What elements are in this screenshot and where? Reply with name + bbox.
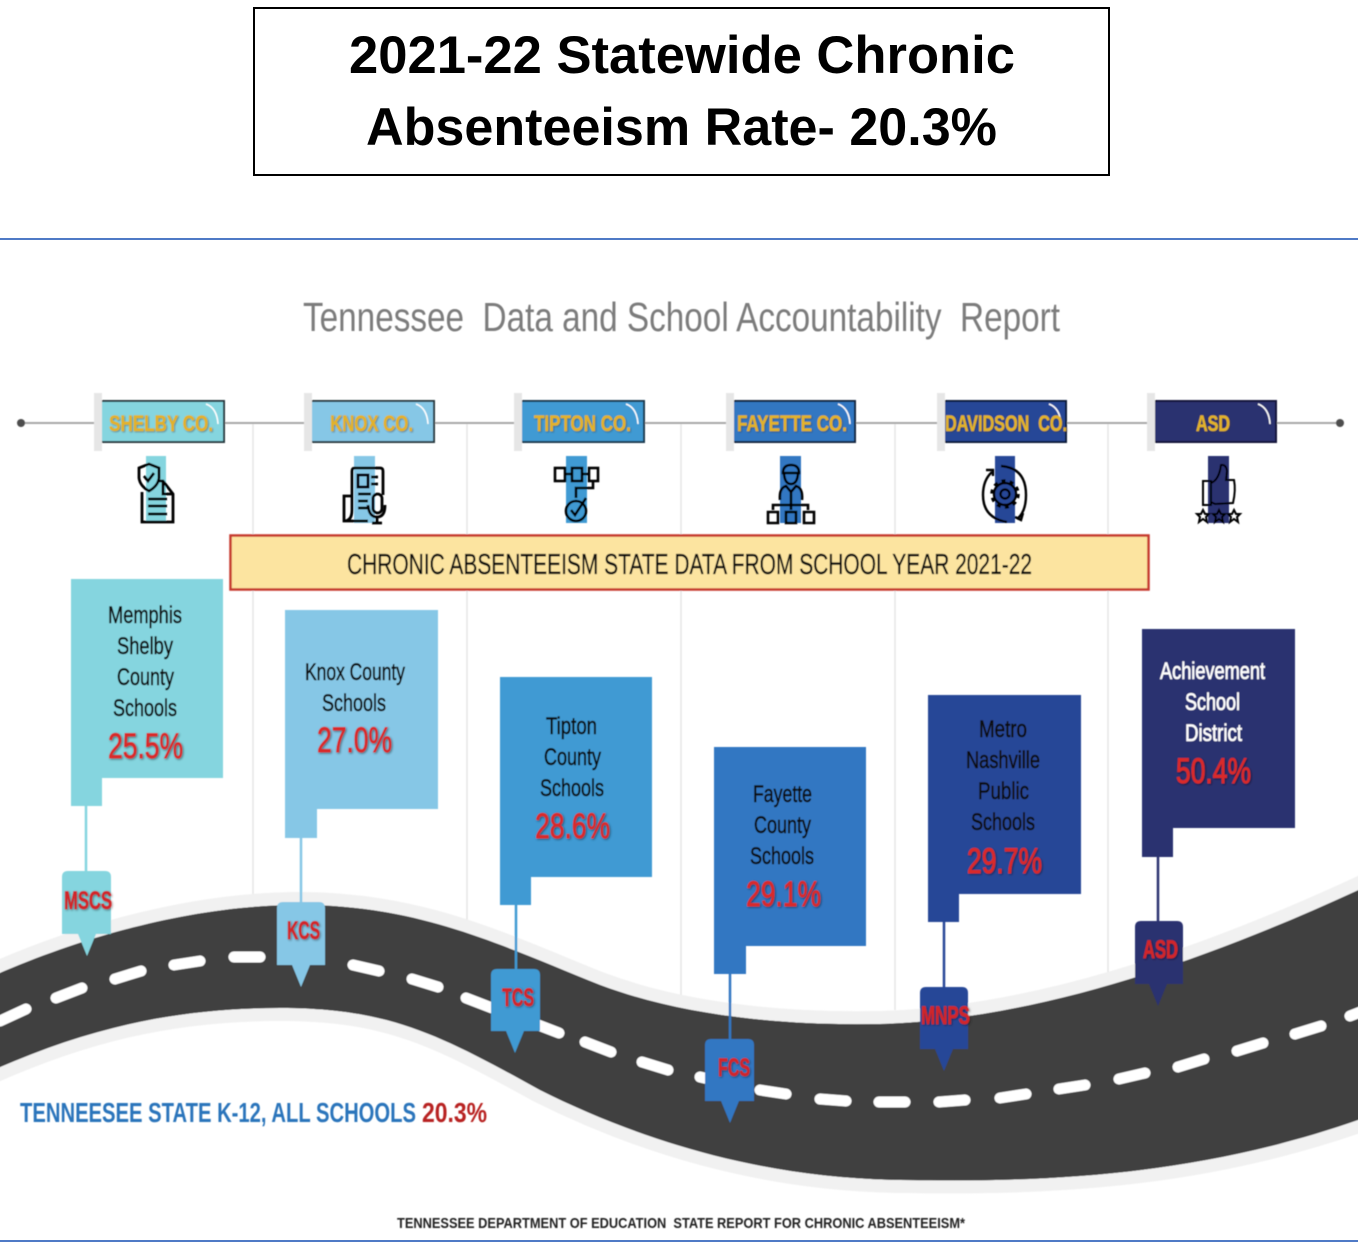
callout: Memphis Shelby County Schools: 25.5% xyxy=(108,727,183,766)
pin: MNPS: MNPS xyxy=(921,1002,970,1030)
timeline line xyxy=(17,419,1344,427)
pin: ASD: ASD xyxy=(1143,936,1178,964)
callout: Fayette County Schools: Schools xyxy=(750,843,814,870)
callout: Memphis Shelby County Schools: Schools xyxy=(113,695,177,722)
tag: Shelby Co. xyxy=(94,393,224,451)
pin: MSCS: MSCS xyxy=(64,887,112,915)
road xyxy=(0,880,1358,1180)
statewide rate label: 20.3% xyxy=(422,1097,487,1128)
pin: TCS xyxy=(491,969,540,1053)
pin: MSCS xyxy=(62,871,112,956)
tag: Tipton Co.: TIPTON CO. xyxy=(534,411,631,436)
callout: Knox County Schools: 27.0% xyxy=(317,721,392,760)
callout: Achievement School District: 50.4% xyxy=(1176,752,1251,791)
pin: TCS: TCS xyxy=(502,984,534,1012)
pin: FCS xyxy=(705,1039,754,1123)
callout: Tipton County Schools: 28.6% xyxy=(535,807,610,846)
callout: Metro Nashville Public Schools: Nashville xyxy=(966,747,1040,774)
callout: Fayette County Schools: 29.1% xyxy=(746,875,821,914)
callout: Memphis Shelby County Schools: County xyxy=(117,664,174,691)
tag: Fayette Co. xyxy=(726,393,855,451)
statewide rate label: TENNEESEE STATE K-12, ALL SCHOOLS xyxy=(20,1097,416,1128)
callout: Tipton County Schools: Tipton xyxy=(546,713,597,740)
callout: Memphis Shelby County Schools: Memphis xyxy=(108,602,182,629)
tag: Davidson Co.: DAVIDSON CO. xyxy=(945,411,1067,436)
callout: Metro Nashville Public Schools: Schools xyxy=(971,809,1035,836)
callout: Fayette County Schools: County xyxy=(754,812,811,839)
tag: Davidson Co. xyxy=(937,393,1067,451)
callout: Achievement School District: Achievement xyxy=(1160,658,1265,685)
icon: gear with rotating arrows xyxy=(983,456,1026,523)
pin: FCS: FCS xyxy=(718,1054,750,1082)
icon: workflow with checkmark xyxy=(555,456,598,523)
callout: Knox County Schools xyxy=(285,610,438,904)
callout: Achievement School District: District xyxy=(1185,720,1242,747)
callout: Fayette County Schools: Fayette xyxy=(753,781,812,808)
icon: thumbs up with stars xyxy=(1197,456,1240,523)
banner: CHRONIC ABSENTEEISM STATE DATA FROM SCHOOL YEAR 2021-22 xyxy=(347,549,1032,581)
callout: Fayette County Schools xyxy=(714,747,866,1041)
title box: 2021-22 Statewide Chronic xyxy=(349,26,1015,85)
callout: Metro Nashville Public Schools xyxy=(928,695,1081,989)
tag: ASD: ASD xyxy=(1196,411,1230,436)
callout: Knox County Schools: Knox County xyxy=(305,659,405,686)
callout: Knox County Schools: Schools xyxy=(322,690,386,717)
pin: MNPS xyxy=(920,987,970,1071)
callout: Metro Nashville Public Schools: Public xyxy=(978,778,1029,805)
report heading: Tennessee Data and School Accountability Report xyxy=(303,294,1060,340)
tag: Fayette Co.: FAYETTE CO. xyxy=(737,411,847,436)
title box: Absenteeism Rate- 20.3% xyxy=(366,98,997,157)
callout: Memphis Shelby County Schools xyxy=(71,579,223,872)
pin: KCS xyxy=(277,902,325,987)
tag: Shelby Co.: SHELBY CO. xyxy=(109,411,213,436)
icon: newspaper and microphone xyxy=(344,456,385,523)
icon: worker hierarchy xyxy=(768,456,814,523)
tag: Knox Co.: KNOX CO. xyxy=(330,411,413,436)
callout: Tipton County Schools xyxy=(500,677,652,971)
tag: Tipton Co. xyxy=(514,393,644,451)
callout: Memphis Shelby County Schools: Shelby xyxy=(117,633,173,660)
tag: ASD xyxy=(1147,393,1276,451)
icon: shield and document xyxy=(139,456,173,523)
pin: KCS: KCS xyxy=(287,917,320,945)
callout: Tipton County Schools: Schools xyxy=(540,775,604,802)
callout: Achievement School District: School xyxy=(1185,689,1240,716)
pin: ASD xyxy=(1135,921,1183,1006)
callout: Achievement School District xyxy=(1142,629,1295,923)
callout: Tipton County Schools: County xyxy=(544,744,601,771)
banner xyxy=(230,536,1148,590)
callout: Metro Nashville Public Schools: 29.7% xyxy=(967,842,1042,881)
callout: Metro Nashville Public Schools: Metro xyxy=(979,716,1027,743)
source note: TENNESSEE DEPARTMENT OF EDUCATION STATE REPORT FOR CHRONIC ABSENTEEISM* xyxy=(397,1215,965,1232)
title box xyxy=(254,8,1109,175)
tag: Knox Co. xyxy=(304,393,434,451)
